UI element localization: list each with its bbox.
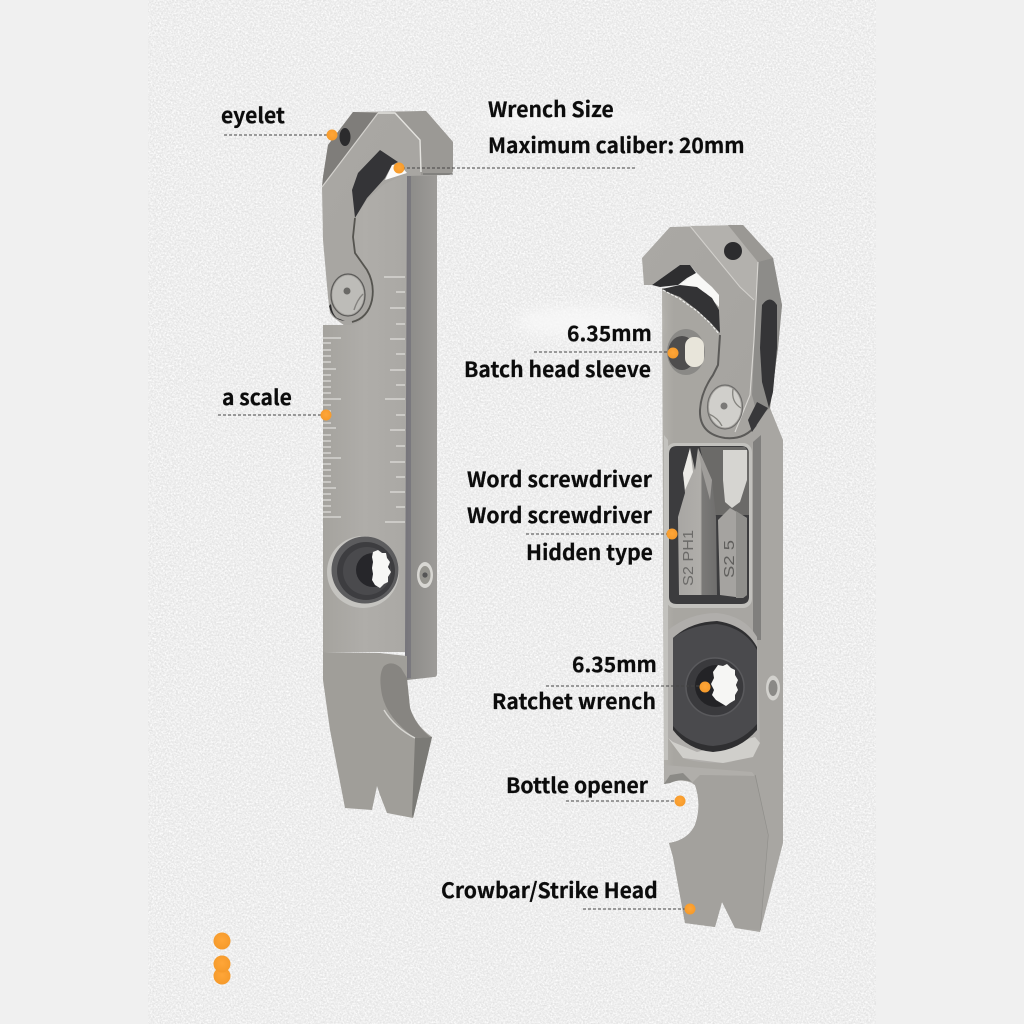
callout: wrench size: Maximum caliber: 20mm [488,130,745,160]
left tool side screw [417,562,433,588]
left tool wrench head [322,111,453,326]
callout: crowbar and strike head [441,875,696,914]
left tool pivot screw [329,274,365,321]
right tool jaw teeth [652,265,756,438]
callout: batch head sleeve [464,318,678,384]
callout: a scale [218,382,332,420]
left tool ruler plate [323,173,407,652]
screwdriver bit: flat: S2 5 [721,540,738,578]
right tool eyelet hole [724,242,742,260]
callout: hidden screwdrivers [467,464,678,567]
left tool side rail [405,174,437,680]
left tool scale ticks [323,277,405,522]
right tool side screw [766,676,780,700]
callout: ratchet wrench [492,649,710,716]
screwdriver bit: phillips: S2 PH1 [680,530,697,586]
left tool jaw teeth [352,150,407,218]
right tool: wrench and bit holder face [642,225,783,932]
left tool eyelet hole [340,128,350,146]
callout: eyelet: eyelet [221,100,285,130]
left tool: wrench and ruler face [322,111,453,818]
right tool wrench head [642,225,782,438]
callout: wrench size [394,94,745,174]
left tool hinge line [352,218,373,322]
callout: eyelet [221,100,338,140]
right tool ratchet housing [668,613,760,763]
white retouch patch behind labels [475,108,655,338]
callout: ratchet wrench: 6.35mm [572,649,657,679]
screwdriver bit: flat [718,450,747,598]
screwdriver bit: phillips [678,448,717,595]
callout: a scale: a scale [222,382,292,412]
callout: hidden screwdrivers: Word screwdriver [467,464,653,494]
left tool ratchet socket [327,536,399,608]
callout: bottle opener: Bottle opener [506,770,649,800]
callout: batch head sleeve: Batch head sleeve [464,354,651,384]
right tool side edge [664,435,768,930]
callout: hidden screwdrivers: Word screwdriver [467,500,653,530]
callout: batch head sleeve: 6.35mm [567,318,652,348]
callout: wrench size: Wrench Size [488,94,614,124]
right tool bit sleeve [667,329,705,375]
right tool pivot screw [708,385,768,432]
callout: ratchet wrench: Ratchet wrench [492,686,656,716]
right tool body [662,288,783,932]
callout: crowbar and strike head: Crowbar/Strike Head [441,875,658,905]
right tool bit compartment [666,443,752,608]
callout: hidden screwdrivers: Hidden type [526,537,653,567]
callout: bottle opener [506,770,686,806]
right tool side slot [760,300,777,408]
left tool pry bar and opener [323,652,432,818]
orange marker dots [214,932,230,984]
right tool opener arch and pry bar [664,765,768,930]
